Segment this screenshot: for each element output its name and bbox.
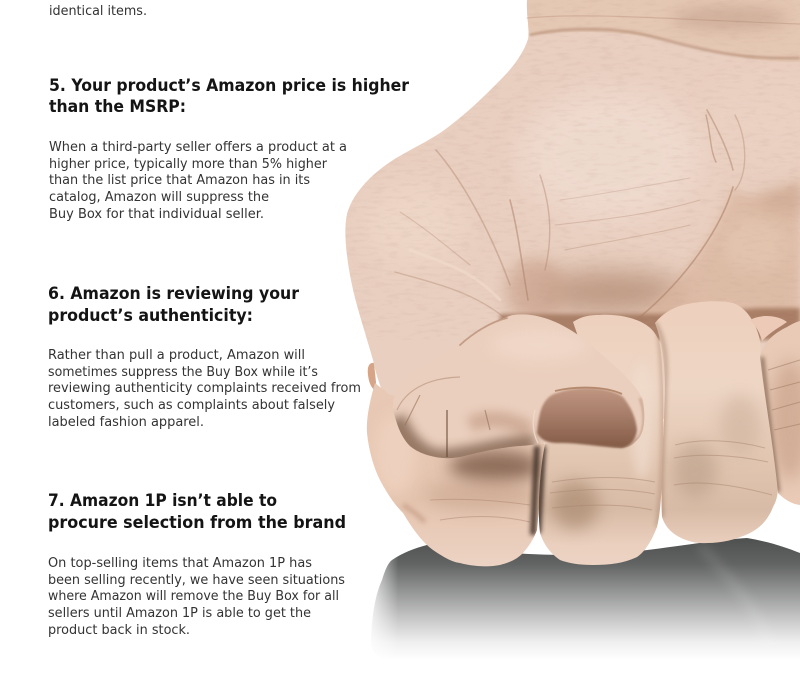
section 5 heading [49,75,410,116]
section 6 heading: 6. Amazon is reviewing your [48,283,300,303]
section 7 heading [48,490,346,532]
section 5 heading: than the MSRP: [49,96,186,116]
section 5 body text [49,140,347,222]
section 7 body text [48,556,345,638]
thumb with nail [393,314,644,460]
middle finger [650,300,785,545]
fist reflection on surface [368,538,800,665]
section 5 body text: catalog, Amazon will suppress the [49,190,269,205]
lower finger under thumb [360,380,550,570]
section 5 body text: Buy Box for that individual seller. [49,207,264,222]
section 7 body text: product back in stock. [48,623,190,638]
palm [340,0,800,420]
index finger [538,314,664,565]
small finger nub behind palm [368,363,377,392]
palm and wrist creases [395,16,800,345]
text block: end of section 4: identical items. [49,4,147,19]
section 6 body text: customers, such as complaints about falsely [48,398,335,413]
section 7 body text: On top-selling items that Amazon 1P has [48,556,312,571]
section 6 body text: labeled fashion apparel. [48,415,204,430]
palm skin texture [380,40,762,331]
section 6 body text: sometimes suppress the Buy Box while it’s [48,365,318,380]
section 6 body text: reviewing authenticity complaints received from [48,381,361,396]
wrist band shading [527,0,800,62]
section 5 body text: higher price, typically more than 5% higher [49,157,328,172]
section 7 heading: procure selection from the brand [48,512,346,532]
section 5 body text: When a third-party seller offers a product at a [49,140,347,155]
section 6 body text [48,348,361,430]
section 5 body text: than the list price that Amazon has in its [49,173,310,188]
thumbnail [537,388,637,448]
illustration: clenched fist with reflection [340,0,800,665]
section 6 heading [48,283,300,325]
small finger gap tip [750,316,787,341]
ring finger [760,321,800,505]
section 7 body text: been selling recently, we have seen situations [48,573,345,588]
section 7 body text: sellers until Amazon 1P is able to get the [48,606,311,621]
section 5 heading: 5. Your product’s Amazon price is higher [49,75,410,95]
section 7 heading: 7. Amazon 1P isn’t able to [48,490,277,510]
section 7 body text: where Amazon will remove the Buy Box for all [48,589,339,604]
section 6 heading: product’s authenticity: [48,305,253,325]
section 6 body text: Rather than pull a product, Amazon will [48,348,305,363]
